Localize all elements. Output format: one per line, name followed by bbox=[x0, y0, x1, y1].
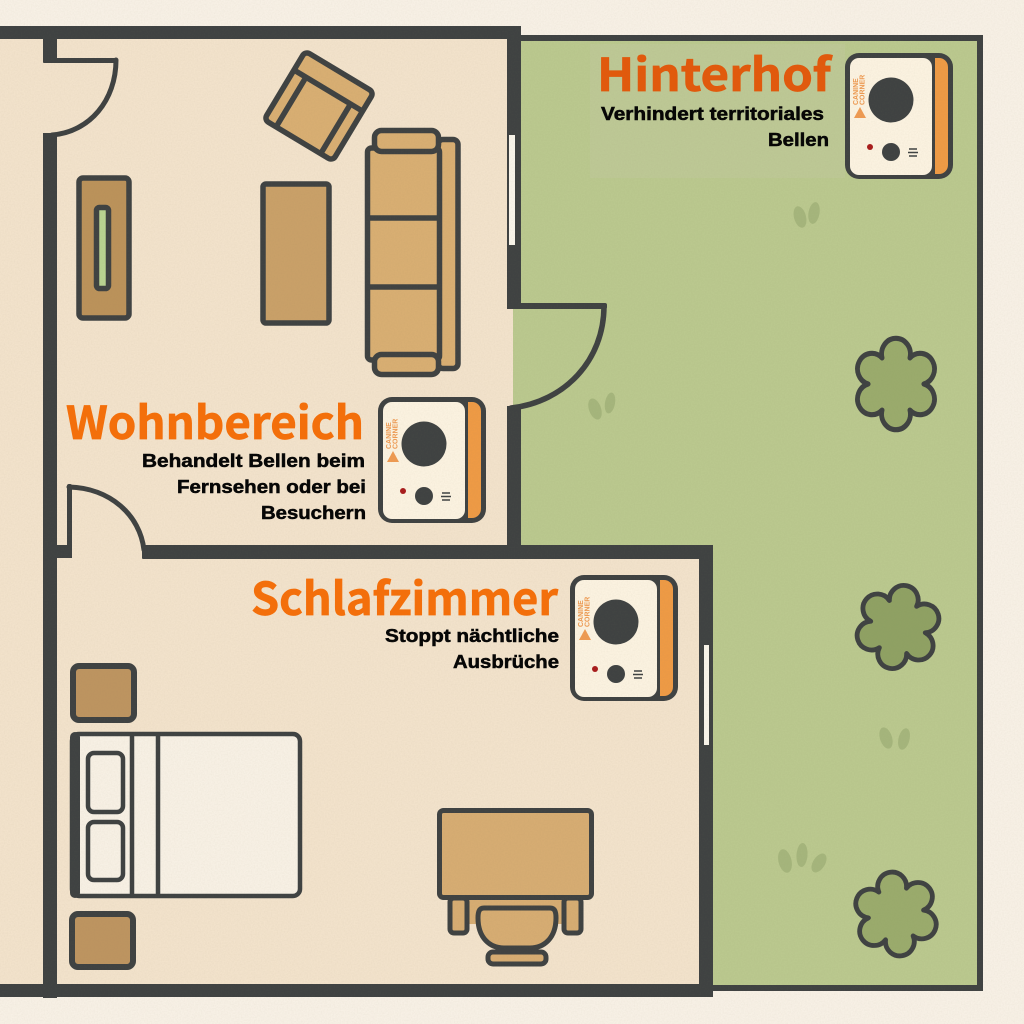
text: Wohnbereich description: Fernsehen oder bei bbox=[177, 477, 366, 497]
door swing: bedroom door bbox=[69, 487, 144, 550]
tv screen bbox=[96, 208, 108, 288]
pillow: lower bbox=[88, 822, 123, 880]
device red led bbox=[867, 144, 873, 150]
device speaker bbox=[868, 78, 914, 122]
desk and chair bbox=[440, 810, 592, 964]
device button bbox=[607, 665, 625, 683]
grass tuft: by door bbox=[586, 392, 617, 421]
grass tuft: lower bbox=[877, 726, 912, 751]
device logo: CANINE bbox=[853, 78, 860, 105]
desk leg: left bbox=[450, 898, 467, 933]
nightstand: bottom bbox=[72, 914, 133, 967]
heading: Wohnbereich: Wohnbereich bbox=[66, 387, 364, 452]
bush: middle bbox=[852, 578, 944, 676]
blanket fold bbox=[132, 734, 158, 896]
device button bbox=[882, 143, 900, 161]
bush: upper bbox=[858, 338, 934, 430]
device side panel bbox=[651, 580, 673, 696]
device logo: CANINE bbox=[578, 600, 585, 627]
panel: interior floors bbox=[0, 38, 700, 985]
device side panel bbox=[459, 402, 481, 518]
device body bbox=[383, 402, 468, 519]
sofa seats bbox=[368, 148, 440, 360]
text: Wohnbereich description: Besuchern bbox=[261, 503, 366, 523]
grass tuft: triple bbox=[776, 843, 830, 875]
device vents bbox=[441, 493, 451, 500]
text: Schlafzimmer description: Stoppt nächtliche bbox=[385, 626, 559, 646]
text: Hinterhof description bbox=[601, 104, 829, 150]
device logo: CANINE bbox=[386, 422, 393, 449]
door swing: entry top left bbox=[52, 60, 116, 135]
device logo: CORNER bbox=[584, 597, 592, 627]
sofa bbox=[367, 130, 458, 374]
device body bbox=[850, 58, 935, 175]
device speaker bbox=[402, 422, 446, 466]
chair footrest bbox=[488, 952, 546, 964]
device red led bbox=[400, 488, 406, 494]
desk top bbox=[440, 810, 592, 898]
device logo: CORNER bbox=[860, 75, 866, 105]
device: living room bbox=[378, 397, 486, 523]
coffee table bbox=[263, 184, 329, 323]
bush: lower bbox=[852, 867, 940, 961]
sofa back bbox=[438, 140, 458, 368]
window: bedroom bbox=[704, 645, 709, 745]
device logo bbox=[386, 419, 400, 462]
device: backyard bbox=[845, 53, 953, 179]
device red led bbox=[592, 666, 598, 672]
device logo bbox=[853, 75, 866, 118]
device: bedroom bbox=[570, 575, 678, 701]
heading: Schlafzimmer: Schlafzimmer bbox=[251, 563, 558, 628]
door swing: backyard door bbox=[511, 306, 604, 408]
device side panel bbox=[926, 58, 948, 174]
text: Hinterhof description: Verhindert territoriales bbox=[601, 104, 824, 124]
text: Wohnbereich description bbox=[142, 451, 366, 523]
device body bbox=[575, 580, 660, 697]
sofa armrest: bottom bbox=[374, 354, 438, 374]
device speaker bbox=[594, 600, 638, 644]
text: Hinterhof description: Bellen bbox=[768, 130, 829, 150]
tv console bbox=[79, 178, 129, 318]
device logo bbox=[578, 597, 592, 640]
bed bbox=[70, 732, 300, 898]
pillow: upper bbox=[88, 753, 123, 812]
text: Schlafzimmer description: Ausbrüche bbox=[453, 652, 559, 672]
device vents bbox=[908, 149, 918, 156]
armchair bbox=[264, 51, 374, 161]
device logo: CORNER bbox=[392, 419, 400, 449]
heading: Hinterhof: Hinterhof bbox=[597, 39, 833, 104]
text: Wohnbereich description: Behandelt Bellen beim bbox=[142, 451, 365, 471]
sofa armrest: top bbox=[374, 130, 438, 152]
device button bbox=[415, 487, 433, 505]
grass tuft: upper bbox=[791, 201, 821, 229]
device vents bbox=[633, 671, 643, 678]
panel: backyard lawn bbox=[513, 38, 980, 988]
desk leg: right bbox=[564, 898, 581, 933]
nightstand: top bbox=[73, 666, 134, 720]
window: living room bbox=[509, 135, 515, 245]
chair seat bbox=[478, 908, 556, 948]
text: Schlafzimmer description bbox=[385, 626, 559, 672]
